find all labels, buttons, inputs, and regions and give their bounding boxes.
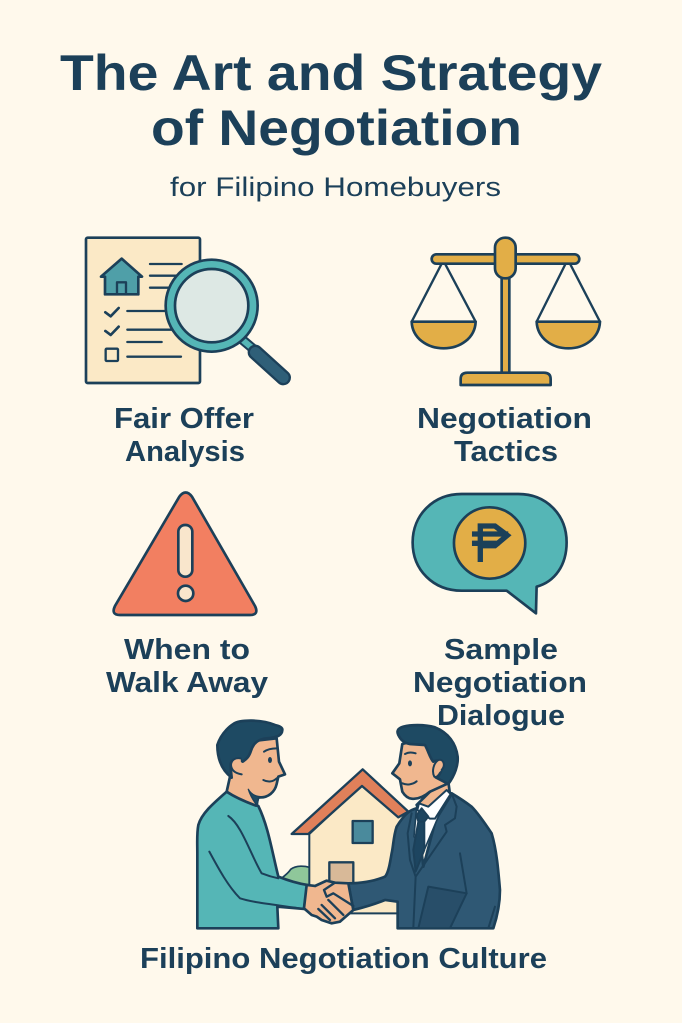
panel: when to walk away — [106, 492, 268, 699]
title: of Negotiation — [151, 100, 522, 156]
title — [60, 45, 602, 156]
label: Negotiation — [417, 403, 592, 435]
label — [114, 403, 254, 468]
panel: filipino negotiation culture — [140, 721, 547, 975]
icon: document with magnifying glass — [86, 238, 283, 383]
panel: sample negotiation dialogue — [413, 494, 587, 732]
illustration: handshake in front of house — [197, 721, 500, 928]
panel: fair offer analysis — [86, 238, 283, 468]
label — [413, 634, 587, 732]
bush — [282, 866, 309, 885]
panel: negotiation tactics — [412, 238, 600, 468]
label: Walk Away — [106, 667, 268, 699]
lapels — [408, 793, 457, 928]
label: Fair Offer — [114, 403, 254, 435]
title: The Art and Strategy — [60, 45, 602, 101]
label: Negotiation — [413, 667, 587, 699]
hair — [398, 725, 458, 784]
man in navy suit — [348, 725, 500, 928]
label: Sample — [444, 634, 558, 666]
label: Tactics — [454, 436, 558, 468]
icon: speech bubble with peso coin — [413, 494, 567, 613]
pocket — [418, 887, 467, 928]
label: Dialogue — [437, 700, 565, 732]
label — [106, 634, 268, 699]
man in teal sweater — [197, 721, 307, 928]
subtitle: for Filipino Homebuyers — [170, 172, 501, 202]
tie — [413, 808, 428, 872]
icon: warning triangle — [114, 492, 256, 615]
handshake — [304, 881, 353, 923]
suit — [348, 793, 500, 928]
label: Analysis — [125, 436, 245, 468]
label: Filipino Negotiation Culture — [140, 943, 547, 975]
shirt and collar — [414, 794, 452, 848]
icon: balance scale — [412, 238, 600, 385]
house — [292, 769, 408, 913]
neck and face — [417, 780, 450, 810]
label — [417, 403, 592, 468]
label: When to — [124, 634, 250, 666]
